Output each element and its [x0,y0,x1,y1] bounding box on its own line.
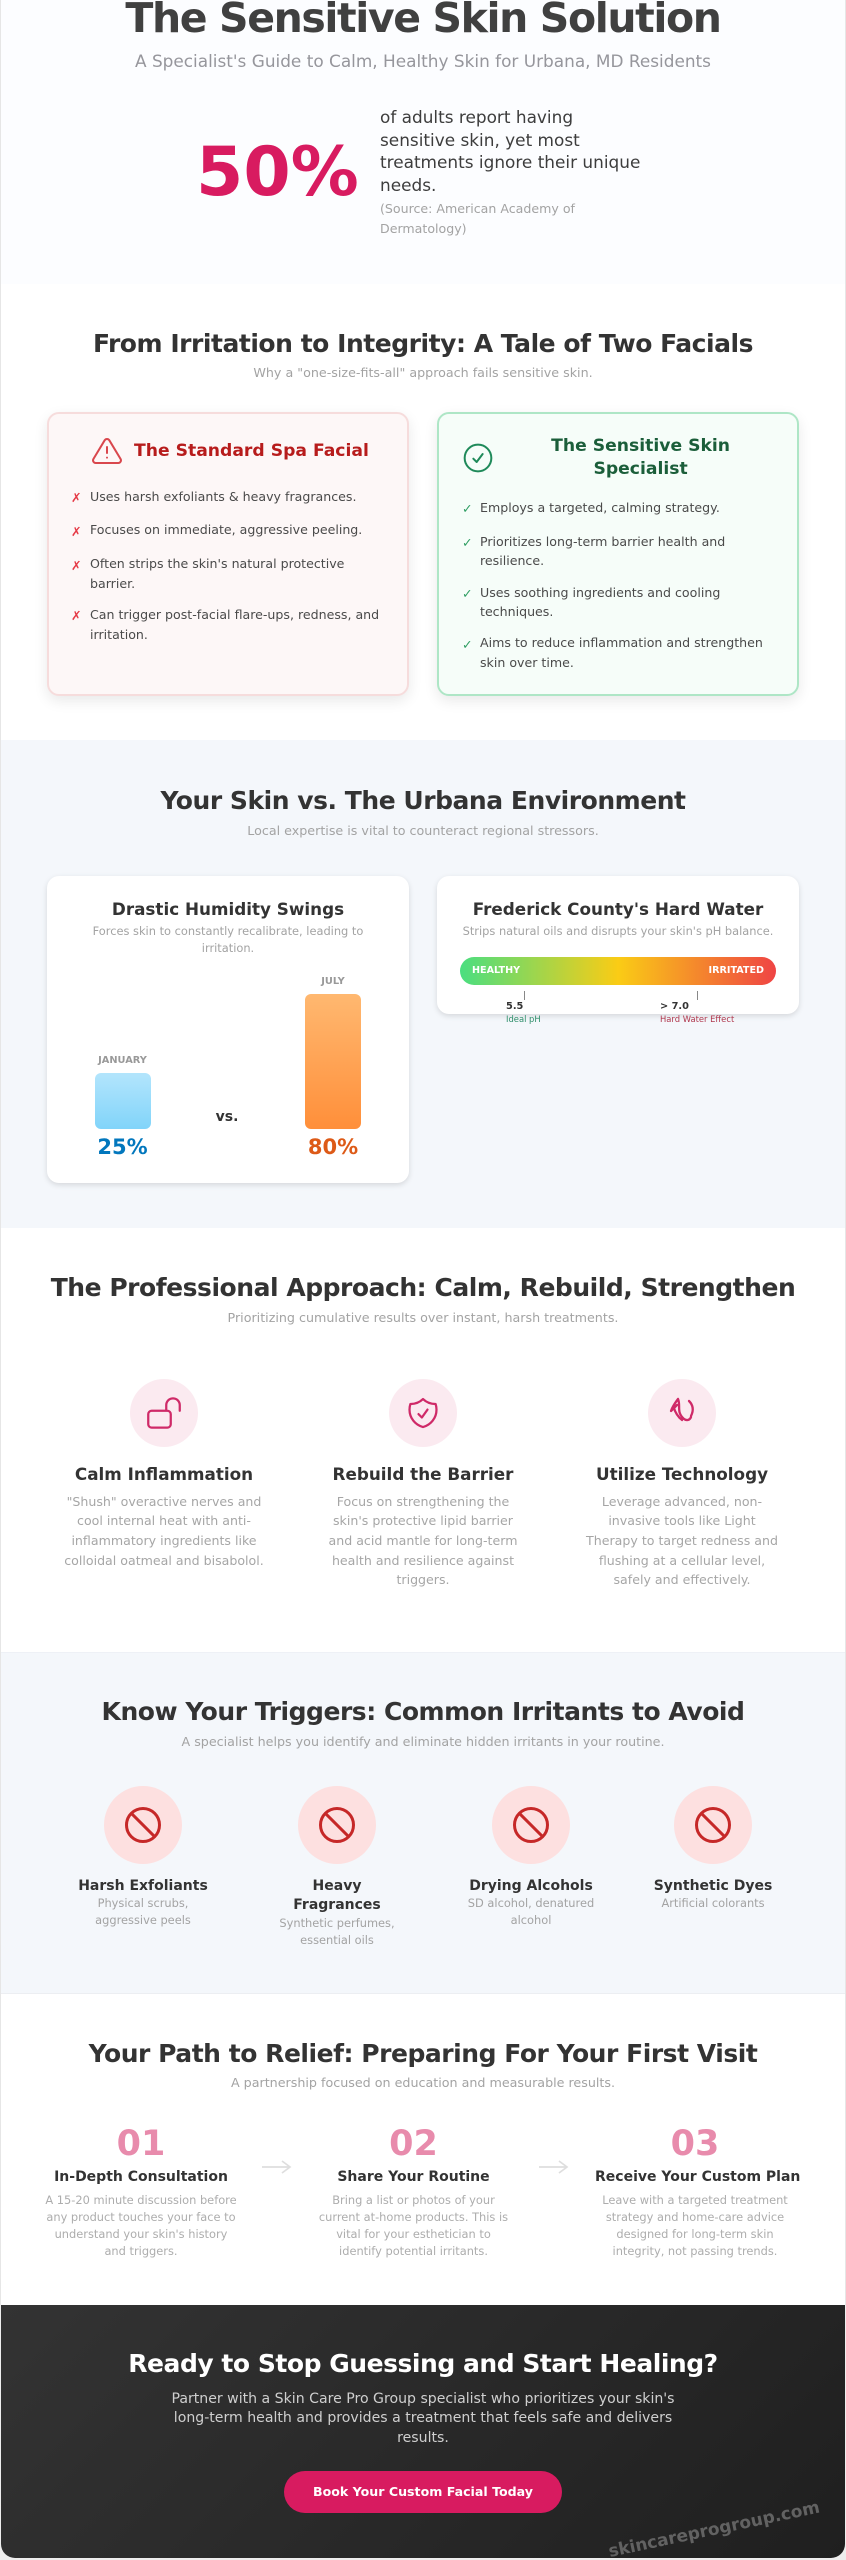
column text: safely and effectively. [613,1572,750,1587]
list item: barrier. [90,576,135,591]
trigger title [293,1878,381,1913]
list item: ✗ [71,490,82,505]
column text: Leverage advanced, non- [602,1494,762,1508]
card title: Frederick County's Hard Water [473,899,763,919]
column text: colloidal oatmeal and bisabolol. [64,1553,264,1568]
heading: Your Skin vs. The Urbana Environment [160,786,686,815]
list item [462,584,720,619]
list item: ✓ [462,501,473,516]
step number: 03 [671,2124,719,2164]
column text: triggers. [396,1572,450,1587]
label: JULY [321,976,345,987]
step text: strategy and home-care advice [606,2210,784,2224]
icon: prohibited [104,1786,182,1864]
panel: header [0,0,846,285]
card description [93,924,363,955]
gauge label: irritated: IRRITATED [709,965,764,976]
body text: Partner with a Skin Care Pro Group specialist who prioritizes your skin's [171,2391,675,2407]
step 1 [45,2124,237,2258]
value: 5.5: 5.5 [506,1001,523,1012]
subheading: Prioritizing cumulative results over instant, harsh treatments. [228,1310,618,1325]
step text: current at-home products. This is [319,2210,508,2224]
stat description: needs. [380,175,436,195]
list item: techniques. [480,604,553,619]
list item: Often strips the skin's natural protective [90,556,344,571]
card: standard spa facial [47,412,409,696]
bar [94,1073,151,1129]
column text [586,1494,778,1587]
column text: flushing at a cellular level, [599,1553,765,1568]
icon: prohibited [298,1786,376,1864]
list item: ✓ [462,637,473,652]
card description: Strips natural oils and disrupts your skin's pH balance. [463,924,773,938]
trigger title: Synthetic Dyes [654,1878,772,1894]
heading: From Irritation to Integrity: A Tale of Two Facials [93,329,753,358]
list item [71,556,344,591]
trigger title: Harsh Exfoliants [78,1878,208,1894]
trigger title: Drying Alcohols [469,1878,593,1894]
side edges of page [0,0,1,2305]
list item [71,607,379,642]
heading: The Professional Approach: Calm, Rebuild, Strengthen [51,1273,795,1302]
trigger: heavy fragrances [279,1786,395,1947]
step text: A 15-20 minute discussion before [45,2193,237,2207]
card description: irritation. [202,941,254,955]
subheading: A specialist helps you identify and eliminate hidden irritants in your routine. [181,1734,665,1749]
step number: 01 [117,2124,165,2164]
column title: Utilize Technology [596,1464,768,1484]
card title [551,436,730,479]
marker: hard water [660,991,734,1024]
step text [319,2193,508,2258]
panel: path to relief [0,1994,846,2305]
subheading: A partnership focused on education and measurable results. [231,2075,615,2090]
label: JANUARY [98,1055,147,1066]
step text: understand your skin's history [55,2227,227,2241]
trigger text: alcohol [511,1913,551,1927]
step text: integrity, not passing trends. [613,2244,777,2258]
subtitle: A Specialist's Guide to Calm, Healthy Skin for Urbana, MD Residents [135,51,711,71]
pH gauge [460,957,776,985]
button: Book Your Custom Facial Today [313,2484,533,2499]
panel: professional approach [0,1228,846,1652]
list item [462,635,763,670]
column text: inflammatory ingredients like [71,1533,257,1548]
card title: Specialist [593,459,688,479]
column title: Rebuild the Barrier [333,1464,513,1484]
body text [0,2390,846,2449]
column text: Focus on strengthening the [337,1494,509,1508]
trigger text [468,1896,594,1927]
icon: warning triangle [92,438,122,464]
list item: Prioritizes long-term barrier health and [480,534,725,548]
body text: results. [397,2430,449,2446]
icon: light therapy [648,1379,716,1447]
list item: Uses soothing ingredients and cooling [480,584,720,600]
bar chart: january [95,1055,151,1159]
column text: Therapy to target redness and [586,1533,778,1548]
card description: Forces skin to constantly recalibrate, leading to [93,924,363,938]
vs label: vs. [216,1109,238,1125]
column text: "Shush" overactive nerves and [67,1494,261,1508]
trigger title: Heavy [313,1878,361,1894]
column text: cool internal heat with anti- [77,1513,251,1528]
step number: 02 [389,2124,438,2164]
trigger title: Fragrances [293,1897,381,1913]
panel: call to action [1,2305,845,2558]
step 3 [595,2124,800,2258]
card title: Drastic Humidity Swings [112,899,344,919]
card title: The Standard Spa Facial [134,441,369,461]
panel: triggers [0,1652,846,1994]
stat description: sensitive skin, yet most [380,130,580,150]
list item: resilience. [480,553,544,568]
card: sensitive skin specialist [437,412,799,696]
big stat: 50%: 50% [196,133,359,212]
list item: ✓ [462,535,473,550]
step title: Receive Your Custom Plan [595,2169,800,2185]
stat source: Dermatology) [380,221,467,236]
step text: identify potential irritants. [339,2244,488,2258]
panel: comparison of two facials [0,284,846,740]
arrow [262,2160,291,2174]
icon: shield check [389,1379,457,1447]
list item: Uses harsh exfoliants & heavy fragrances. [90,488,356,504]
step text: any product touches your face to [46,2210,236,2224]
caption: ideal pH: Ideal pH [506,1014,541,1024]
trigger text [279,1916,395,1947]
column title: Calm Inflammation [75,1464,253,1484]
stat source: (Source: American Academy of [380,201,575,216]
step title: In-Depth Consultation [54,2169,228,2185]
panel: environment [0,740,846,1228]
list item: Employs a targeted, calming strategy. [480,500,720,515]
trigger: synthetic dyes [654,1786,772,1910]
trigger: drying alcohols [468,1786,594,1927]
step text: Bring a list or photos of your [332,2193,495,2207]
column text [64,1494,264,1568]
subheading: Why a "one-size-fits-all" approach fails sensitive skin. [253,365,593,380]
list item: irritation. [90,626,148,642]
step text: vital for your esthetician to [336,2227,491,2241]
button [284,2471,562,2513]
list item: Can trigger post-facial flare-ups, redness, and [90,607,379,622]
trigger text: aggressive peels [95,1913,191,1927]
step text [45,2193,237,2258]
column text: skin's protective lipid barrier [333,1513,513,1528]
list item: ✗ [71,558,82,573]
step 2 [319,2124,508,2258]
stat source [380,201,576,236]
gauge label: healthy: HEALTHY [472,965,520,976]
step text [595,2192,795,2260]
bar [304,994,361,1129]
body text: long-term health and provides a treatment that feels safe and delivers [174,2410,672,2426]
heading: Your Path to Relief: Preparing For Your First Visit [89,2039,757,2068]
list item [462,534,725,568]
icon: open lock [130,1379,198,1447]
list item: ✗ [71,608,82,623]
list item: Aims to reduce inflammation and strengthen [480,635,763,650]
list item: ✗ [71,524,82,539]
value: greater than 7.0: > 7.0 [660,1001,689,1012]
icon: prohibited [674,1786,752,1864]
caption: hard water effect: Hard Water Effect [660,1014,734,1024]
marker: ideal pH [506,991,541,1024]
trigger text: Synthetic perfumes, [279,1916,395,1930]
trigger text [95,1896,191,1927]
column text: and acid mantle for long-term [329,1533,517,1548]
list item: Focuses on immediate, aggressive peeling. [90,522,362,537]
trigger: harsh exfoliants [78,1786,208,1927]
stat description: of adults report having [380,107,573,127]
step text: and triggers. [104,2244,178,2258]
trigger text: SD alcohol, denatured [468,1896,594,1910]
subheading: Local expertise is vital to counteract regional stressors. [247,823,599,838]
trigger text: Artificial colorants [661,1896,765,1910]
value: 25% [97,1135,148,1159]
column text: health and resilience against [332,1553,514,1568]
trigger text: essential oils [300,1933,374,1947]
arrow [539,2160,568,2174]
column text [329,1494,517,1587]
trigger text: Physical scrubs, [98,1896,188,1910]
bar chart: july [305,976,361,1159]
icon: check circle [464,444,492,472]
column text: invasive tools like Light [608,1513,756,1528]
step title: Share Your Routine [337,2169,490,2185]
card: humidity chart [47,876,409,1183]
list item: ✓ [462,586,473,601]
step text: Leave with a targeted treatment [602,2193,788,2207]
icon: prohibited [492,1786,570,1864]
stat description [380,107,640,195]
step text: designed for long-term skin [616,2227,774,2241]
card title: The Sensitive Skin [551,436,730,456]
value: 80% [308,1135,358,1159]
card: hard water gauge [437,876,799,1014]
heading: Ready to Stop Guessing and Start Healing? [128,2349,718,2378]
stat description: treatments ignore their unique [380,152,640,172]
heading: Know Your Triggers: Common Irritants to Avoid [102,1697,744,1726]
list item: skin over time. [480,655,574,670]
